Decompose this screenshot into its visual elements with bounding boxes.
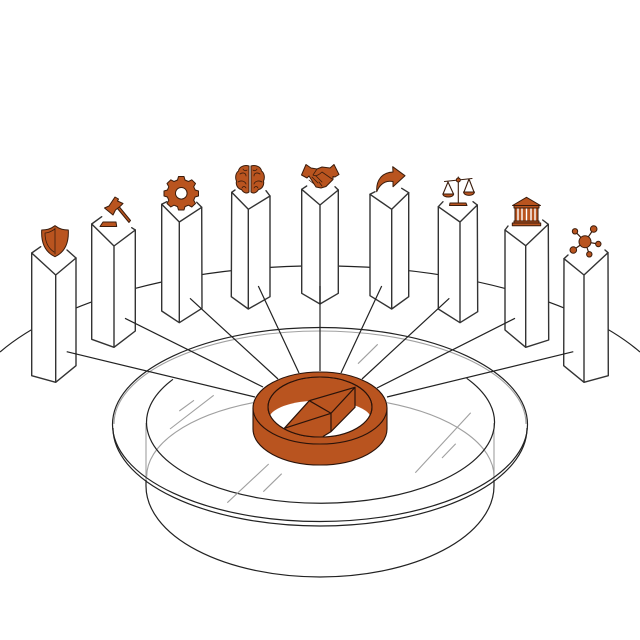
connector lines from pillars to ring xyxy=(67,286,573,397)
glass reflections xyxy=(170,344,471,503)
icon: handshake xyxy=(302,164,339,188)
pillar 3: gear xyxy=(162,176,202,323)
icon: gear xyxy=(164,176,198,210)
icon: gavel xyxy=(100,197,130,226)
icon: shield xyxy=(42,226,68,257)
central ring with prism xyxy=(253,372,387,465)
table bowl base xyxy=(146,403,494,577)
icon: scales of justice xyxy=(443,177,474,206)
pillar 9: network xyxy=(564,226,608,382)
ring inner edge xyxy=(268,377,372,437)
pillar 4: brain xyxy=(231,166,270,309)
prism in ring centre xyxy=(284,387,355,437)
icon: curved arrow xyxy=(377,167,405,192)
ring opening xyxy=(269,400,371,438)
pillar 7: scales xyxy=(438,177,478,323)
pillar 6: arrow xyxy=(370,167,409,309)
pillar 8: bank xyxy=(505,197,549,347)
glass table xyxy=(112,328,528,577)
icon: brain xyxy=(236,166,264,193)
pillar 2: gavel xyxy=(92,197,135,347)
ring outer side xyxy=(253,408,387,465)
pillar 5: handshake xyxy=(302,164,339,304)
ring inner wall xyxy=(268,377,372,437)
table top rim xyxy=(112,328,528,526)
back arc behind pillars xyxy=(0,266,640,352)
icon: network nodes xyxy=(570,226,601,257)
ring top face xyxy=(253,372,387,444)
icon: bank building xyxy=(512,197,541,226)
pillar 1: shield xyxy=(32,226,76,382)
table inner ellipse xyxy=(147,378,495,503)
